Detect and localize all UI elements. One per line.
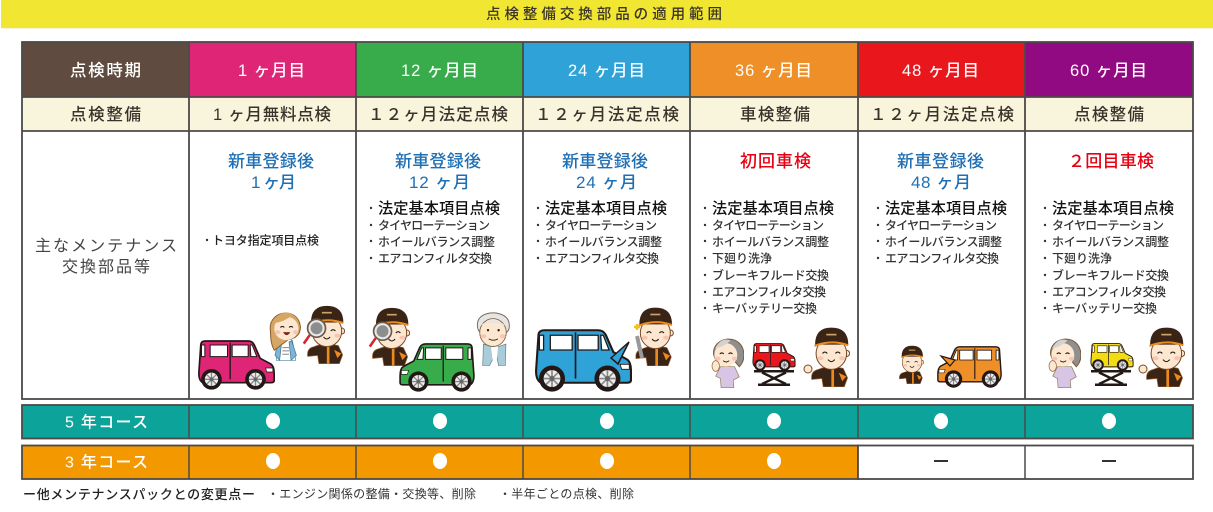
table sub-header row: inspection type: 1 ヶ月無料点検 bbox=[213, 105, 332, 124]
row: 3 year course bbox=[22, 445, 1193, 479]
column: 36 months: ブレーキフルード交換 bbox=[712, 268, 829, 282]
column: 60 months: タイヤローテーション bbox=[1052, 218, 1164, 232]
column: 36 months: 下廻り洗浄 bbox=[712, 250, 772, 266]
column: 48 months: ホイールバランス調整 bbox=[885, 234, 1002, 249]
row label: main maintenance: 交換部品等 bbox=[62, 258, 150, 276]
footnote: changes from other packs: ・半年ごとの点検、削除 bbox=[499, 486, 634, 501]
table sub-header row: inspection type: １２ヶ月法定点検 bbox=[870, 105, 1014, 124]
column: 60 months: ２回目車検 bbox=[1068, 152, 1154, 171]
column: 12 months: 12 ヶ月 bbox=[409, 173, 470, 192]
title banner: 点検整備交換部品の適用範囲 bbox=[486, 5, 722, 23]
column: 60 months: エアコンフィルタ交換 bbox=[1052, 284, 1166, 299]
column: 24 months: ホイールバランス調整 bbox=[545, 234, 662, 249]
table sub-header row: inspection type: 点検整備 bbox=[70, 105, 141, 124]
column: 48 months: 法定基本項目点検 bbox=[885, 200, 1007, 218]
row: 5 year course: 5 年コース bbox=[65, 414, 148, 432]
illustration: green car with mechanic and elderly man bbox=[370, 308, 509, 392]
table sub-header row: inspection type bbox=[22, 97, 1193, 131]
column: 24 months: 法定基本項目点検 bbox=[545, 200, 667, 218]
row label: main maintenance: 主なメンテナンス bbox=[35, 237, 177, 255]
row: 5 year course bbox=[22, 405, 1193, 438]
column: 12 months: エアコンフィルタ交換 bbox=[378, 250, 492, 266]
column: 12 months bbox=[370, 152, 500, 266]
column: 48 months bbox=[877, 152, 1007, 266]
title banner bbox=[1, 0, 1213, 29]
column: 12 months: 新車登録後 bbox=[395, 152, 481, 171]
column: 60 months: 下廻り洗浄 bbox=[1052, 250, 1112, 266]
column: 36 months: ホイールバランス調整 bbox=[712, 234, 829, 249]
column: 36 months: タイヤローテーション bbox=[712, 218, 824, 232]
table sub-header row: inspection type: 点検整備 bbox=[1074, 105, 1144, 124]
column: 24 months: 24 ヶ月 bbox=[576, 173, 637, 192]
table sub-header row: inspection type: １２ヶ月法定点検 bbox=[368, 105, 508, 124]
column: 12 months: 法定基本項目点検 bbox=[378, 200, 500, 218]
column: 24 months: タイヤローテーション bbox=[545, 218, 657, 232]
table header row: inspection timing: 12 ヶ月目 bbox=[401, 62, 478, 80]
table grid bbox=[22, 42, 1193, 399]
column: 60 months: ホイールバランス調整 bbox=[1052, 234, 1169, 249]
table header row: inspection timing bbox=[22, 42, 1193, 97]
table header row: inspection timing: 36 ヶ月目 bbox=[735, 62, 812, 80]
column: 24 months bbox=[537, 152, 667, 266]
column: 36 months bbox=[704, 152, 834, 316]
column: 1 month: 新車登録後 bbox=[228, 152, 314, 171]
table sub-header row: inspection type: 車検整備 bbox=[740, 105, 810, 124]
column: 1 month: トヨタ指定項目点検 bbox=[212, 232, 319, 248]
column: 36 months: 法定基本項目点検 bbox=[712, 200, 834, 218]
column: 48 months: エアコンフィルタ交換 bbox=[885, 250, 999, 266]
footnote: changes from other packs: ・エンジン関係の整備・交換等、削除 bbox=[267, 487, 476, 501]
column: 60 months bbox=[1044, 152, 1174, 316]
column: 48 months: タイヤローテーション bbox=[885, 218, 997, 232]
column: 1 month bbox=[206, 152, 319, 248]
illustration: blue car with mechanic bbox=[536, 308, 673, 392]
footnote: changes from other packs bbox=[23, 486, 634, 502]
table header row: inspection timing: 1 ヶ月目 bbox=[238, 62, 305, 80]
column: 60 months: ブレーキフルード交換 bbox=[1052, 268, 1169, 282]
column: 36 months: キーバッテリー交換 bbox=[712, 300, 817, 316]
illustration: pink car with customer and mechanic bbox=[199, 306, 345, 390]
row label: main maintenance bbox=[35, 237, 177, 276]
column: 48 months: 48 ヶ月 bbox=[911, 173, 971, 192]
column: 36 months: 初回車検 bbox=[740, 152, 811, 171]
illustration: orange car with small mechanic bbox=[899, 346, 1001, 388]
column: 36 months: エアコンフィルタ交換 bbox=[712, 284, 826, 299]
column: 60 months: 法定基本項目点検 bbox=[1052, 200, 1174, 218]
column: 24 months: 新車登録後 bbox=[562, 152, 648, 171]
illustration: red car on lift with mechanic bbox=[712, 328, 850, 388]
footnote: changes from other packs: ー他メンテナンスパックとの変更点ー bbox=[23, 487, 255, 502]
column: 48 months: 新車登録後 bbox=[897, 152, 984, 171]
column: 12 months: タイヤローテーション bbox=[378, 218, 490, 232]
column: 1 month: 1 ヶ月 bbox=[251, 173, 296, 192]
column: 12 months: ホイールバランス調整 bbox=[378, 234, 495, 249]
illustration: yellow car on lift with mechanic bbox=[1049, 328, 1185, 388]
table header row: inspection timing: 60 ヶ月目 bbox=[1070, 62, 1147, 80]
table header row: inspection timing: 24 ヶ月目 bbox=[568, 62, 645, 80]
column: 60 months: キーバッテリー交換 bbox=[1052, 300, 1157, 316]
column: 24 months: エアコンフィルタ交換 bbox=[545, 250, 659, 266]
table sub-header row: inspection type: １２ヶ月法定点検 bbox=[535, 105, 680, 124]
table header row: inspection timing: 48 ヶ月目 bbox=[902, 62, 979, 80]
table header row: inspection timing: 点検時期 bbox=[70, 61, 141, 80]
row: 3 year course: 3 年コース bbox=[65, 454, 148, 472]
